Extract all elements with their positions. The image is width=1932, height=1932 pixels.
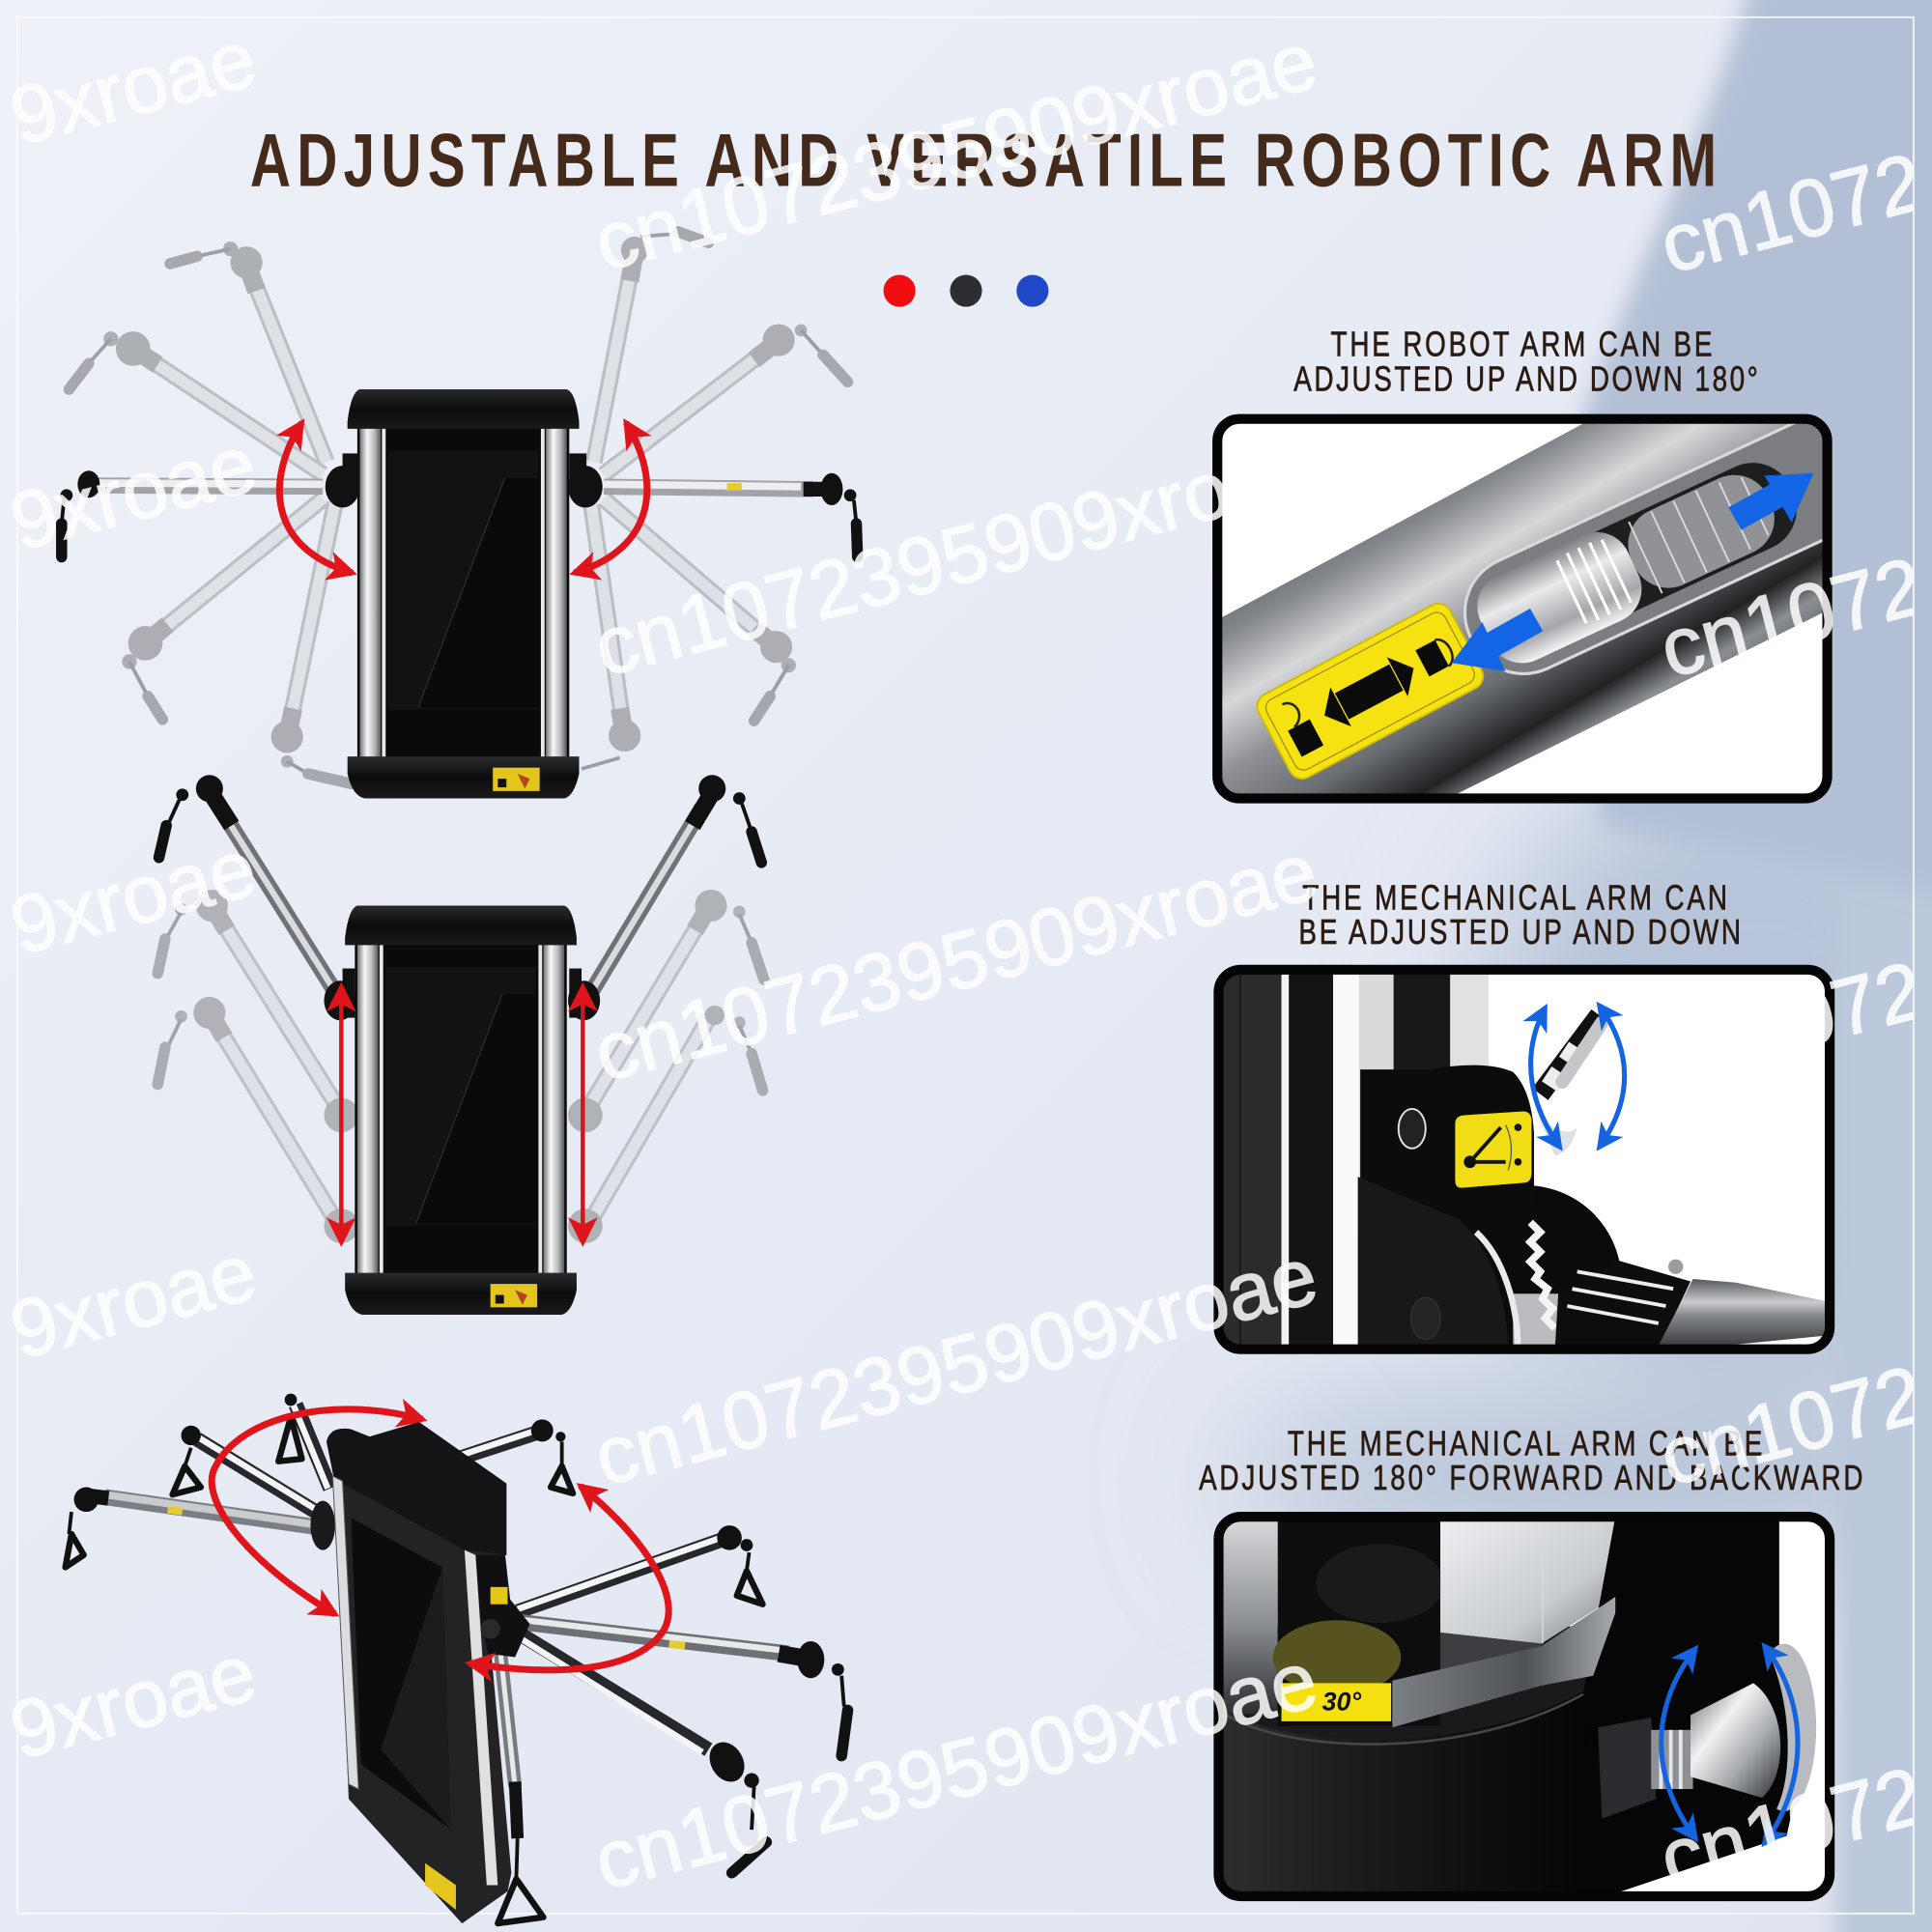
colour swatches: [884, 274, 1048, 307]
watermarks: 9xroae: [1, 1626, 265, 1776]
vertical rail: [1218, 970, 1489, 1350]
caption: robot arm 180: ADJUSTED UP AND DOWN 180°: [1293, 359, 1758, 398]
yellow 30 label: 30°: [1322, 1687, 1361, 1716]
threaded stud: [1651, 1730, 1693, 1789]
bearing wheel: [1460, 1185, 1619, 1345]
panel: base joint close-up: [1218, 1517, 1830, 1896]
caption: mechanical arm up and down: [1298, 878, 1741, 952]
watermarks: cn1072395909xroae: [585, 1634, 1326, 1907]
slider pill: [1463, 423, 1822, 675]
black rear block: [1571, 1517, 1811, 1896]
watermarks: 9xroae: [1, 821, 265, 972]
cylinder base: [1218, 1691, 1589, 1896]
diagram: arm rotates up and down 180 degrees: [60, 232, 858, 799]
yellow 30 label: [1282, 1683, 1391, 1721]
watermarks: cn1072395909xroae: [585, 825, 1326, 1098]
nut: [1598, 1718, 1656, 1819]
faded arm positions: [157, 890, 764, 1243]
knob and tube: [1555, 1260, 1826, 1350]
silver block: [1440, 1517, 1615, 1644]
dark column: [1278, 1517, 1440, 1726]
watermarks: 9xroae: [1, 417, 265, 568]
pivot bracket: [475, 1555, 529, 1658]
olive window: [1273, 1620, 1401, 1683]
mount block: [1360, 1065, 1538, 1220]
caption: mechanical arm up and down: BE ADJUSTED UP AND DOWN: [1298, 913, 1741, 952]
left arms: [66, 1394, 335, 1567]
diagram: arm adjusted up and down: [157, 775, 764, 1315]
watermarks: 9xroae: [1, 1226, 265, 1376]
red arrows: [341, 987, 582, 1242]
diagram: arm adjusted forward and backward: [66, 1394, 848, 1923]
small arm: [1538, 1015, 1602, 1155]
title: ADJUSTABLE AND VERSATILE ROBOTIC ARM: [250, 118, 1717, 203]
watermarks: cn1072: [1651, 540, 1932, 695]
caption: mechanical arm forward and backward: [1199, 1424, 1863, 1497]
blue arrows: [1662, 1646, 1798, 1843]
metal band: [1392, 1597, 1615, 1727]
machine body: [345, 906, 577, 1315]
machine body: [327, 1422, 511, 1923]
watermarks: cn1072: [1651, 944, 1932, 1098]
yellow pivot label: [1455, 1112, 1531, 1188]
horizontal arms: [60, 470, 858, 557]
panel: pivot close-up: [1218, 970, 1830, 1378]
watermarks: cn1072: [1651, 1349, 1932, 1503]
side plate: [1358, 1177, 1508, 1350]
red arrows: [279, 423, 647, 573]
machine body: [348, 389, 579, 799]
caption: robot arm 180: THE ROBOT ARM CAN BE: [1331, 325, 1713, 363]
disc and bevel: [1697, 1620, 1816, 1830]
cone: [1690, 1683, 1780, 1798]
yellow label: [1253, 599, 1488, 783]
watermarks: cn1072395909xroae: [585, 14, 1326, 288]
caption: robot arm 180: [1293, 325, 1758, 398]
watermarks: cn1072395909xroae: [585, 1229, 1326, 1503]
tube: [1217, 419, 1836, 801]
active arms: [159, 775, 761, 992]
left grey block: [1218, 1517, 1278, 1714]
blue arrows: [1452, 473, 1814, 671]
blue arrows: [1531, 1006, 1625, 1148]
watermarks: cn1072: [1651, 135, 1932, 291]
rear dark fill: [1231, 1627, 1586, 1740]
caption: mechanical arm up and down: THE MECHANICAL ARM CAN: [1302, 878, 1727, 917]
watermarks: cn1072: [1651, 1749, 1932, 1905]
pivots: [324, 969, 600, 1020]
red arrows: [212, 1409, 668, 1670]
caption: mechanical arm forward and backward: THE MECHANICAL ARM CAN BE: [1288, 1424, 1762, 1463]
watermarks: 9xroae: [1, 12, 265, 162]
watermarks: cn1072395909xroae: [585, 419, 1326, 694]
right and lower arms: [453, 1419, 848, 1923]
panel: slider latch close-up: [1212, 413, 1833, 804]
faded arm positions: [69, 232, 848, 783]
caption: mechanical arm forward and backward: ADJUSTED 180° FORWARD AND BACKWARD: [1199, 1459, 1863, 1497]
pivots: [326, 453, 603, 508]
